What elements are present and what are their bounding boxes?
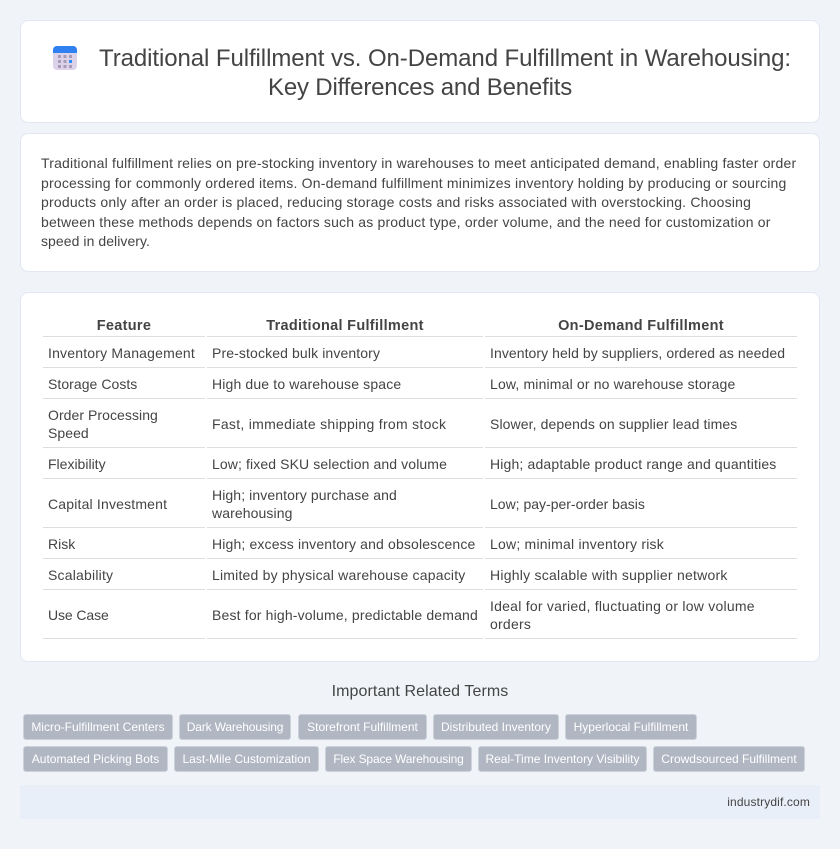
chip: Flex Space Warehousing bbox=[333, 752, 464, 766]
row: order processing speed: Order Processing bbox=[48, 407, 158, 423]
row: storage costs: High due to warehouse space bbox=[212, 376, 401, 392]
row: capital investment: Capital Investment bbox=[48, 496, 167, 512]
chip: Distributed Inventory bbox=[441, 720, 551, 734]
chip: Crowdsourced Fulfillment bbox=[661, 752, 797, 766]
row: scalability: Highly scalable with supplier network bbox=[490, 567, 728, 583]
row: capital investment: Low; pay-per-order basis bbox=[490, 496, 645, 512]
footer bar bbox=[20, 785, 820, 819]
chip bbox=[325, 746, 472, 772]
column headers: Feature bbox=[97, 318, 151, 334]
row: scalability: Limited by physical warehouse capacity bbox=[212, 567, 466, 583]
chip bbox=[174, 746, 319, 772]
title: Key Differences and Benefits bbox=[268, 74, 572, 101]
column headers bbox=[97, 318, 724, 334]
row: inventory management: Inventory Management bbox=[48, 345, 195, 361]
row: flexibility: Low; fixed SKU selection and volume bbox=[212, 456, 447, 472]
chip bbox=[478, 746, 647, 772]
title bbox=[99, 45, 791, 101]
panel: title header bbox=[20, 20, 820, 123]
row: use case bbox=[48, 598, 755, 632]
row: storage costs: Low, minimal or no warehouse storage bbox=[490, 376, 735, 392]
row: order processing speed: Slower, depends on supplier lead times bbox=[490, 416, 737, 432]
row: scalability: Scalability bbox=[48, 567, 113, 583]
row: use case: Use Case bbox=[48, 607, 109, 623]
row: inventory management bbox=[48, 345, 785, 361]
text block: introduction bbox=[41, 155, 796, 249]
row: capital investment: High; inventory purchase and bbox=[212, 487, 397, 503]
row: use case: Best for high-volume, predictable demand bbox=[212, 607, 478, 623]
row: flexibility: Flexibility bbox=[48, 456, 106, 472]
chip: Micro-Fulfillment Centers bbox=[31, 720, 165, 734]
row: order processing speed: Speed bbox=[48, 425, 89, 441]
text block: introduction: processing for commonly ordered items. On-demand fulfillment minimizes inventory holding by producing or sourcing bbox=[41, 174, 786, 190]
chip bbox=[23, 746, 168, 772]
chip bbox=[23, 714, 173, 740]
text block: introduction: between these methods depends on factors such as product type, order volume, and the need for customization or bbox=[41, 214, 771, 230]
row: capital investment bbox=[48, 487, 645, 521]
row: scalability bbox=[48, 567, 728, 583]
chip bbox=[298, 714, 427, 740]
row: risk bbox=[48, 536, 664, 552]
row: capital investment: warehousing bbox=[212, 505, 292, 521]
text block: introduction: Traditional fulfillment relies on pre-stocking inventory in warehouses to meet anticipated demand, enabling faster order bbox=[41, 155, 796, 171]
column headers: Traditional Fulfillment bbox=[266, 318, 424, 334]
row: order processing speed: Fast, immediate shipping from stock bbox=[212, 416, 446, 432]
chip: Dark Warehousing bbox=[187, 720, 283, 734]
chip bbox=[653, 746, 805, 772]
chip bbox=[565, 714, 697, 740]
column headers: On-Demand Fulfillment bbox=[558, 318, 724, 334]
heading: important related terms: Important Related Terms bbox=[332, 683, 508, 700]
chip: Automated Picking Bots bbox=[32, 752, 159, 766]
row: flexibility: High; adaptable product range and quantities bbox=[490, 456, 776, 472]
footer source text: industrydif.com bbox=[727, 795, 810, 809]
title: Traditional Fulfillment vs. On-Demand Fulfillment in Warehousing: bbox=[99, 45, 791, 72]
chip bbox=[179, 714, 291, 740]
row: risk: Risk bbox=[48, 536, 75, 552]
chip: Last-Mile Customization bbox=[182, 752, 311, 766]
row: order processing speed bbox=[48, 407, 737, 441]
row: inventory management: Inventory held by suppliers, ordered as needed bbox=[490, 345, 785, 361]
chip: Real-Time Inventory Visibility bbox=[485, 752, 640, 766]
panel: introduction bbox=[20, 133, 820, 272]
row: use case: Ideal for varied, fluctuating or low volume bbox=[490, 598, 755, 614]
row: flexibility bbox=[48, 456, 776, 472]
row: risk: Low; minimal inventory risk bbox=[490, 536, 664, 552]
chip: Storefront Fulfillment bbox=[307, 720, 418, 734]
related term chips bbox=[23, 714, 805, 772]
icon: calendar bbox=[53, 46, 77, 70]
row: risk: High; excess inventory and obsolescence bbox=[212, 536, 475, 552]
row: storage costs bbox=[48, 376, 735, 392]
row: use case: orders bbox=[490, 616, 531, 632]
chip bbox=[433, 714, 559, 740]
text block: introduction: products only after an order is placed, reducing storage costs and risks associated with overstocking. Choosing bbox=[41, 194, 751, 210]
chip: Hyperlocal Fulfillment bbox=[574, 720, 688, 734]
row: inventory management: Pre-stocked bulk inventory bbox=[212, 345, 380, 361]
panel: comparison table bbox=[20, 292, 820, 662]
row: storage costs: Storage Costs bbox=[48, 376, 137, 392]
text block: introduction: speed in delivery. bbox=[41, 233, 150, 249]
